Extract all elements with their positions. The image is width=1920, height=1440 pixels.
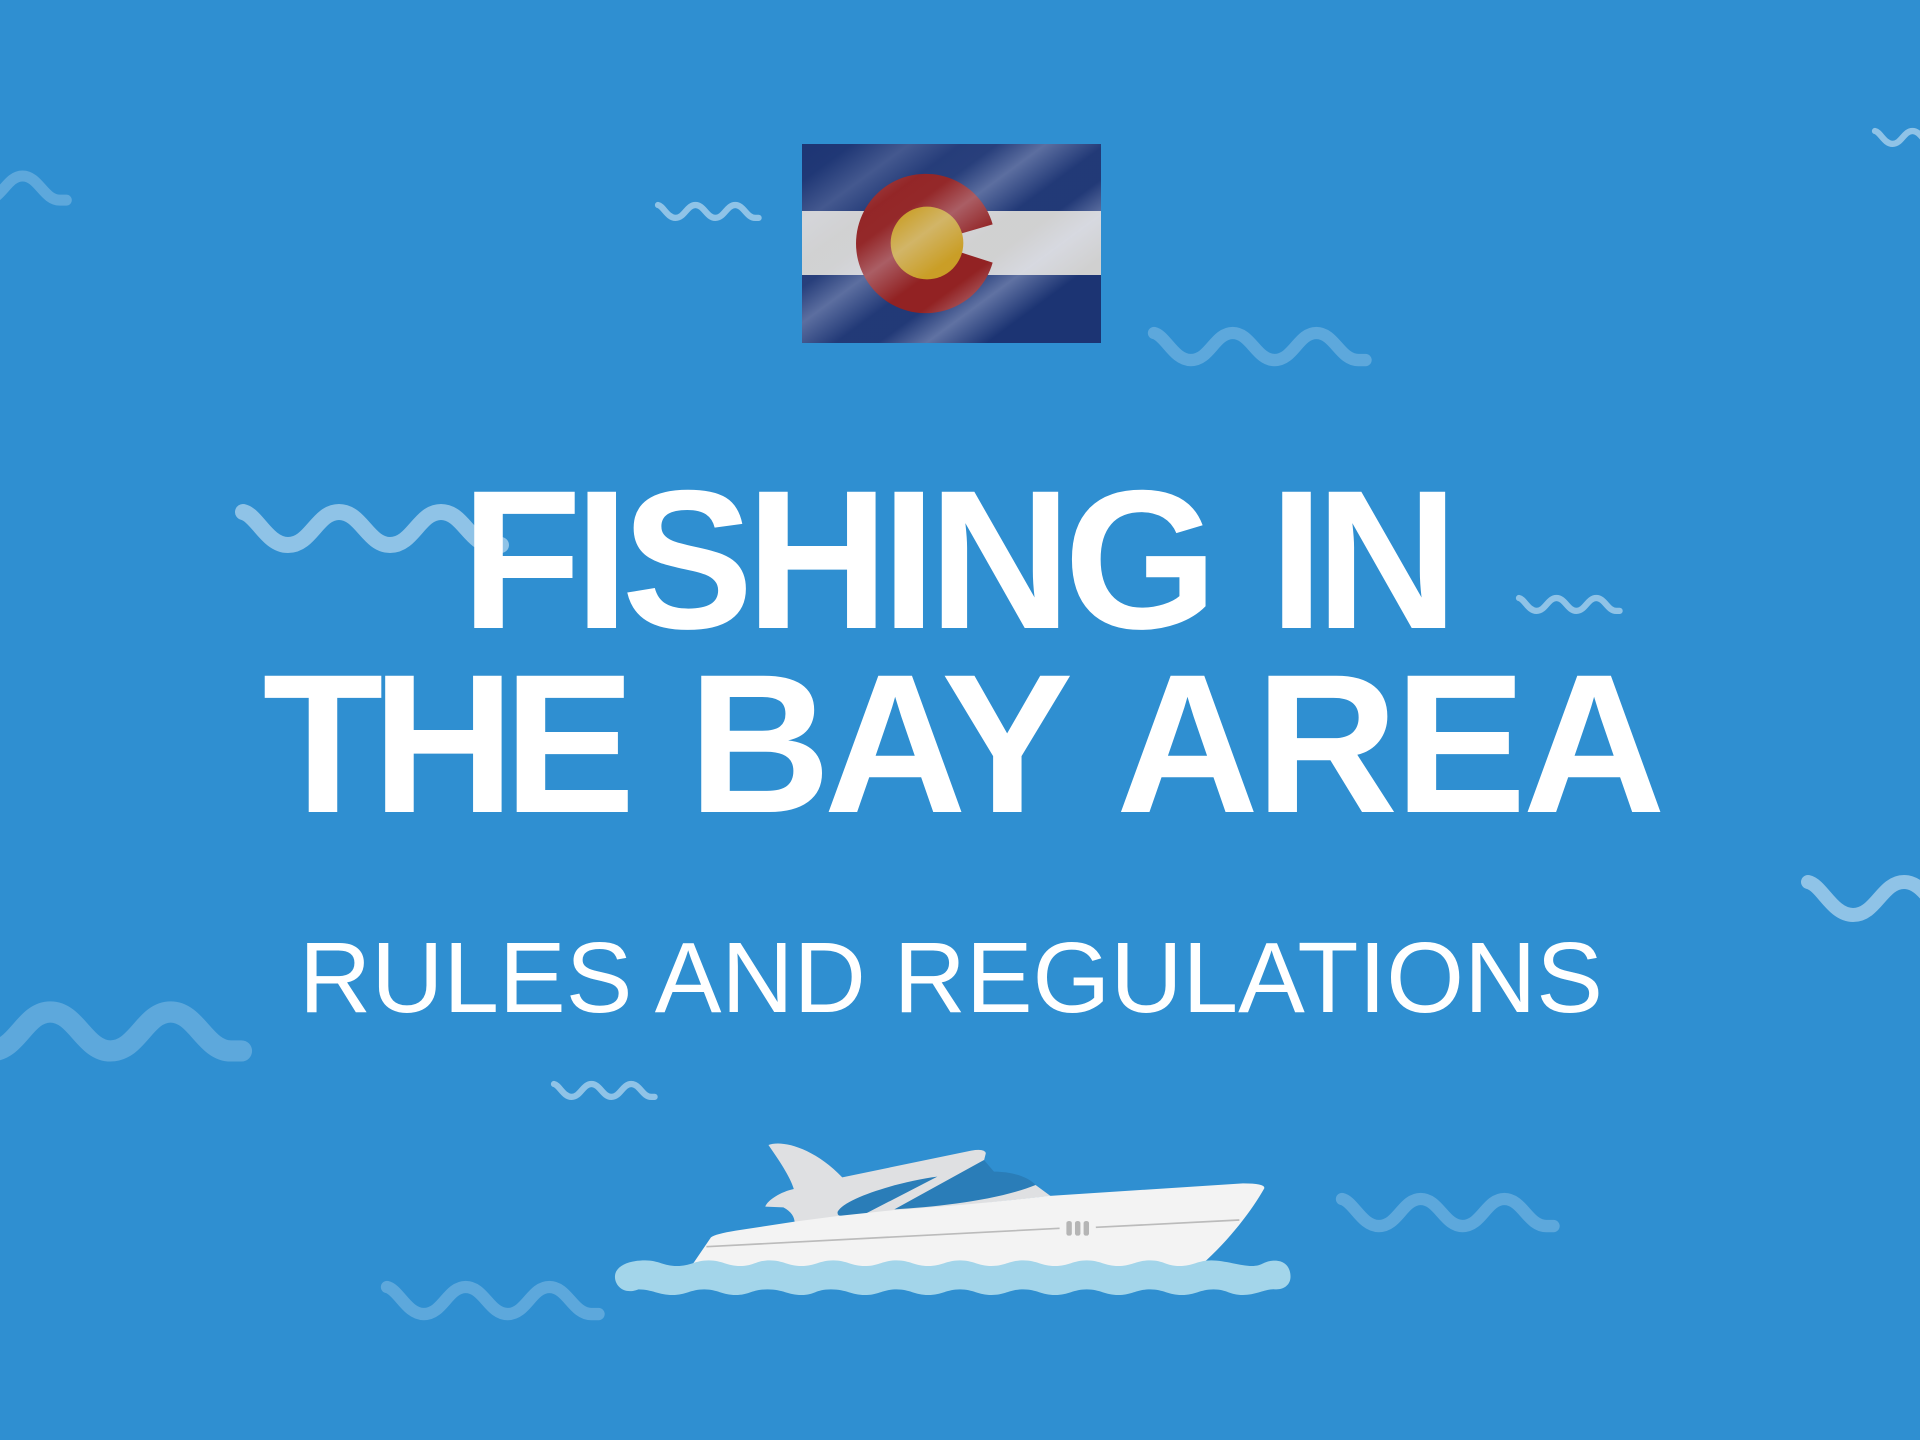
title: THE [262,633,628,854]
title: AREA [1116,633,1662,854]
boat side window [838,1177,937,1216]
wave: below flag right [1154,333,1366,360]
hull trim line [706,1220,1239,1247]
water wave [615,1260,1291,1295]
title: IN [1269,449,1450,670]
subtitle: RULES AND REGULATIONS [299,922,1603,1034]
title: FISHING [461,449,1210,670]
wave: right edge [1808,882,1920,915]
wave: lower right [1342,1199,1554,1226]
wave: small beside flag [658,205,759,218]
boat windshield [894,1160,1036,1209]
wave: small right of title [1519,598,1620,611]
icon: Colorado flag [802,144,1101,343]
title: BAY [688,633,1070,854]
boat hull [693,1183,1264,1277]
boat cabin [765,1143,1051,1223]
wave: large left [0,1012,241,1051]
title [262,449,1662,854]
wave: bottom left [387,1287,599,1314]
wave: top right [1875,131,1920,144]
wave: small lower left [554,1084,655,1097]
illustration: motor yacht on water [615,1143,1291,1295]
hull vents [1066,1221,1089,1236]
wave: large behind title [243,512,501,545]
wave: top left [0,176,66,200]
